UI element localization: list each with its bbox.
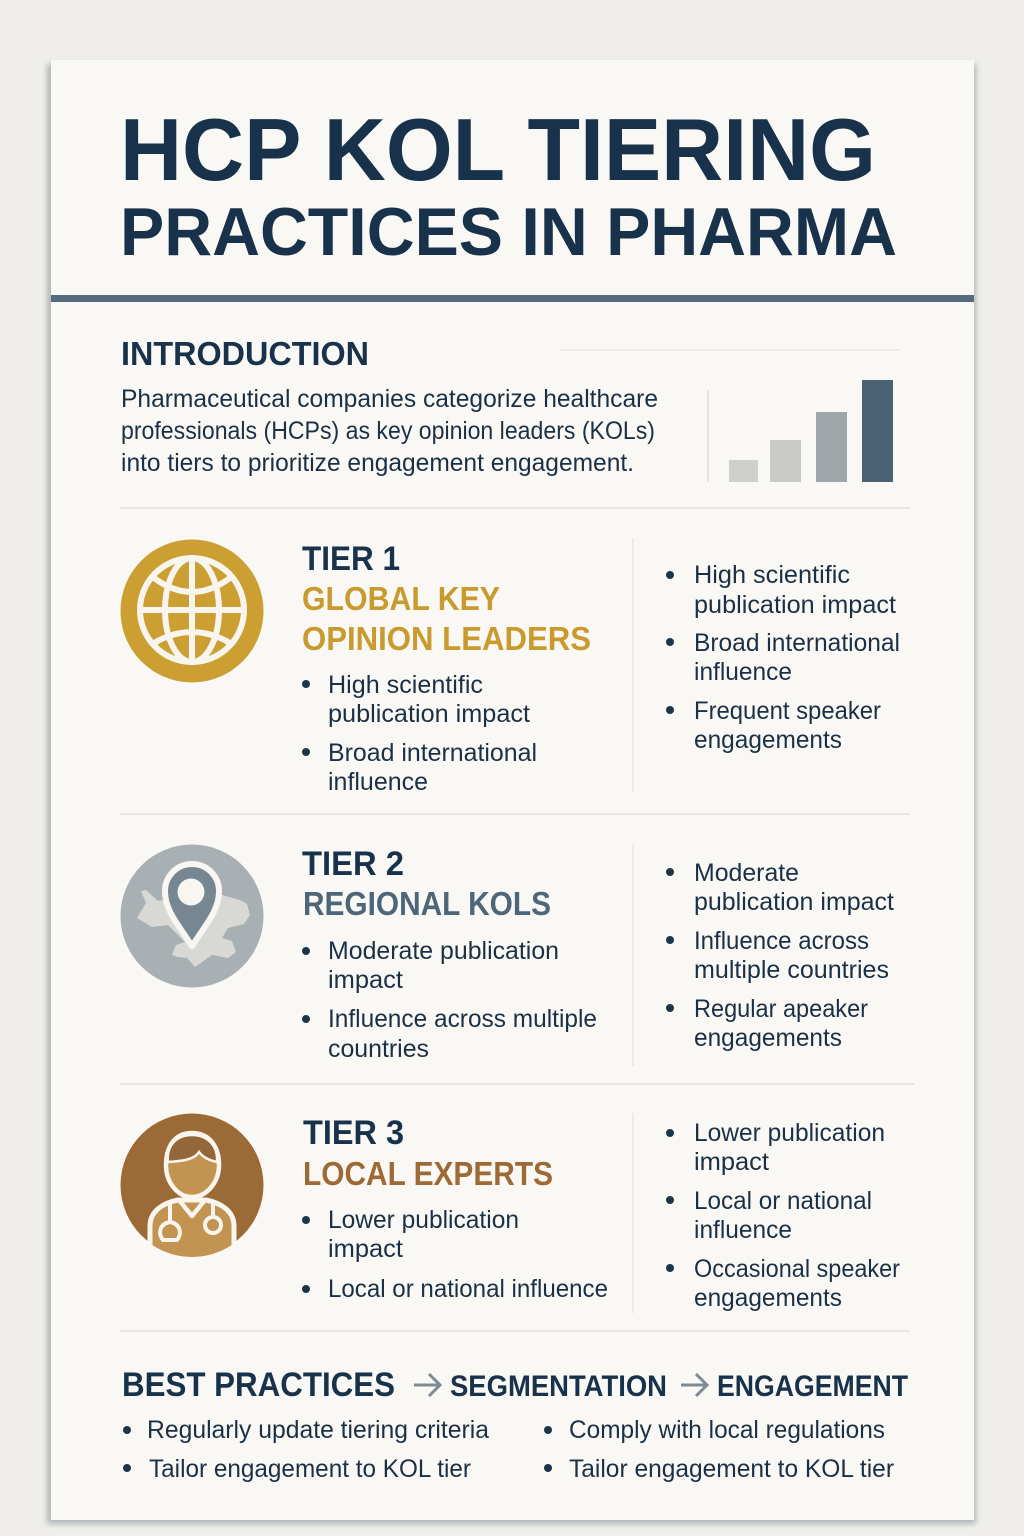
text: introduction body xyxy=(121,385,658,477)
heading: tier 2: TIER 2 xyxy=(302,845,404,883)
list: tier 2 right xyxy=(666,859,894,1052)
arrow xyxy=(681,1374,707,1396)
title: HCP KOL TIERING xyxy=(120,100,876,199)
list: tier 1 left: influence xyxy=(328,768,428,796)
list: tier 3 right: influence xyxy=(694,1216,792,1244)
icon: globe xyxy=(120,540,264,682)
list: tier 3 right: Local or national xyxy=(694,1187,872,1215)
list: tier 1 right: engagements xyxy=(694,726,842,754)
heading: global key opinion leaders xyxy=(302,580,591,657)
heading: segmentation: SEGMENTATION xyxy=(450,1370,667,1403)
panel: tier 3 xyxy=(120,1113,900,1313)
title: PRACTICES IN PHARMA xyxy=(120,194,897,270)
list: best practices right: Comply with local regulations xyxy=(569,1416,885,1444)
list: tier 2 right: Moderate xyxy=(694,859,799,887)
text: introduction body: into tiers to prioritize engagement engagement. xyxy=(121,449,634,477)
list: tier 1 right xyxy=(666,561,900,754)
heading: regional kols: REGIONAL KOLS xyxy=(303,885,551,922)
list: best practices left: Tailor engagement to KOL tier xyxy=(149,1455,471,1483)
icon: map pin xyxy=(120,844,264,988)
list: tier 1 right: publication impact xyxy=(694,591,896,619)
list: tier 3 right: impact xyxy=(694,1148,769,1176)
heading: tier 1: TIER 1 xyxy=(302,540,400,578)
list: tier 2 right: Regular apeaker xyxy=(694,995,868,1023)
list: tier 2 right: engagements xyxy=(694,1024,842,1052)
list: tier 3 right: Lower publication xyxy=(694,1119,885,1147)
list: tier 3 left: Local or national influence xyxy=(328,1275,608,1303)
panel: tier 1 xyxy=(120,538,900,796)
list: tier 3 left: impact xyxy=(328,1235,403,1263)
list: tier 2 left: Moderate publication xyxy=(328,937,559,965)
panel: tier 2 xyxy=(120,844,894,1066)
heading: local experts: LOCAL EXPERTS xyxy=(303,1155,553,1192)
heading: engagement: ENGAGEMENT xyxy=(717,1370,908,1403)
list: best practices left: Regularly update tiering criteria xyxy=(147,1416,489,1444)
list: tier 1 right: influence xyxy=(694,658,792,686)
list: tier 1 left xyxy=(302,671,537,796)
list: tier 1 left: Broad international xyxy=(328,739,537,767)
heading: best practices: BEST PRACTICES xyxy=(122,1366,395,1404)
list: tier 2 left xyxy=(302,937,597,1063)
bar chart xyxy=(707,380,893,482)
list: tier 2 right: multiple countries xyxy=(694,956,889,984)
introduction xyxy=(121,335,658,477)
heading: tier 3: TIER 3 xyxy=(303,1114,404,1152)
heading: introduction: INTRODUCTION xyxy=(121,335,369,372)
heading: global key opinion leaders: GLOBAL KEY xyxy=(302,580,500,617)
list: tier 2 right: Influence across xyxy=(694,927,869,955)
list: tier 3 left xyxy=(302,1206,608,1303)
list: tier 2 left: impact xyxy=(328,966,403,994)
list: tier 1 left: High scientific xyxy=(328,671,483,699)
list: tier 1 left: publication impact xyxy=(328,700,530,728)
list: best practices right: Tailor engagement to KOL tier xyxy=(569,1455,894,1483)
list: tier 1 right: Frequent speaker xyxy=(694,697,881,725)
list: tier 2 right: publication impact xyxy=(694,888,894,916)
list: tier 1 right: Broad international xyxy=(694,629,900,657)
list: tier 3 right: engagements xyxy=(694,1284,842,1312)
list: tier 2 left: countries xyxy=(328,1035,429,1063)
list: tier 3 right: Occasional speaker xyxy=(694,1255,900,1283)
heading: global key opinion leaders: OPINION LEADERS xyxy=(302,620,591,657)
arrow xyxy=(414,1374,440,1396)
list: tier 1 right: High scientific xyxy=(694,561,850,589)
list: tier 2 left: Influence across multiple xyxy=(328,1005,597,1033)
list: tier 3 left: Lower publication xyxy=(328,1206,519,1234)
list: best practices right xyxy=(544,1416,894,1483)
text: introduction body: professionals (HCPs) as key opinion leaders (KOLs) xyxy=(121,417,655,445)
title xyxy=(120,100,897,270)
panel: best practices xyxy=(122,1366,908,1483)
list: tier 3 right xyxy=(666,1119,900,1312)
list: best practices left xyxy=(123,1416,489,1483)
text: introduction body: Pharmaceutical companies categorize healthcare xyxy=(121,385,658,413)
icon: doctor xyxy=(120,1114,264,1262)
